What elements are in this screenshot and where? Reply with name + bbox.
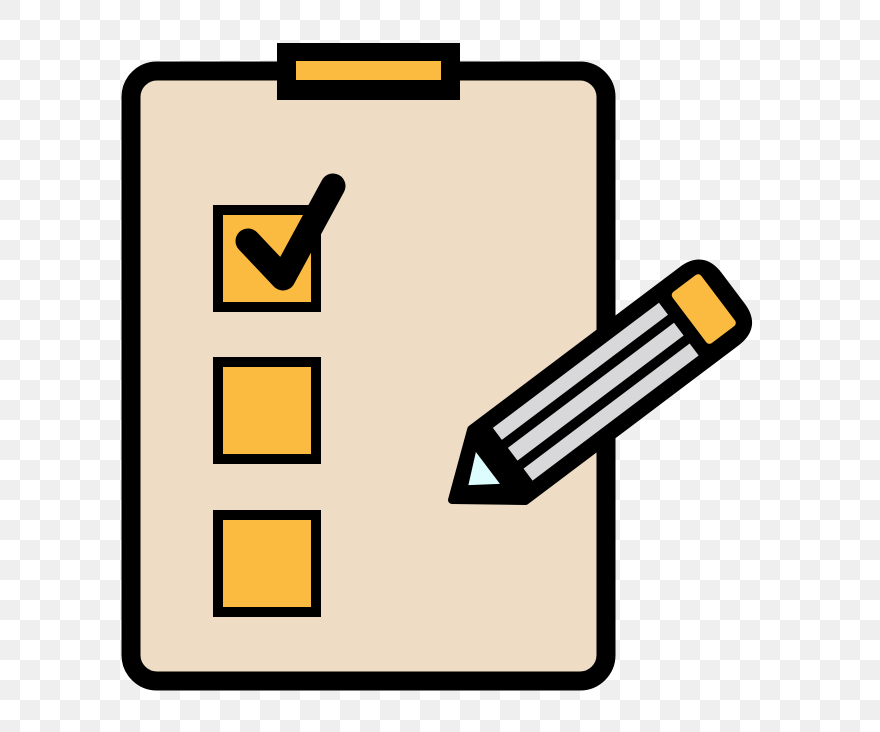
checkbox 1 checked	[218, 186, 333, 307]
icon: pencil	[425, 255, 757, 536]
icon: clipboard	[131, 43, 606, 681]
checkbox 3	[218, 515, 316, 612]
clipboard board	[131, 71, 606, 681]
clipboard clip	[277, 43, 460, 100]
checkbox 2	[218, 362, 316, 459]
